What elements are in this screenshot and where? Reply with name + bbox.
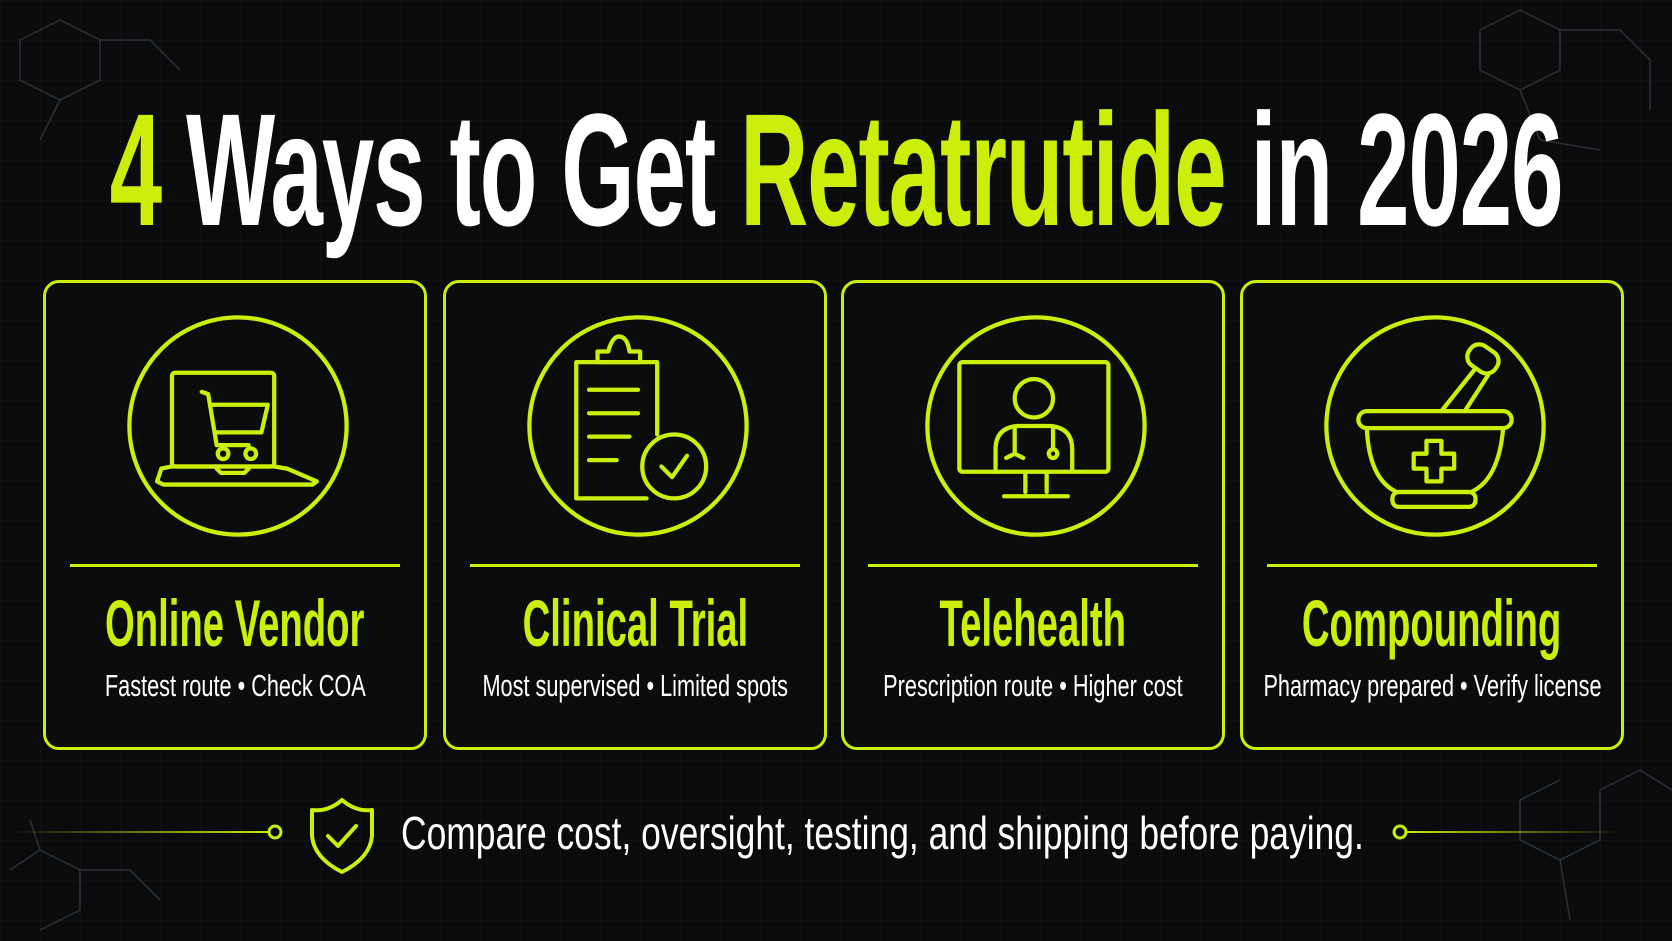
icon: clipboard with check <box>527 315 749 537</box>
icon: laptop with cart <box>127 315 349 537</box>
panel: online vendor <box>43 280 427 750</box>
callout: footer advice: Compare cost, oversight, testing, and shipping before paying. <box>401 807 1364 859</box>
title: 4 Ways to Get Retatrutide in 2026 <box>110 80 1562 259</box>
footer rule left <box>20 824 282 840</box>
text: telehealth note: Prescription route • Higher cost <box>883 668 1183 703</box>
icon: monitor with doctor <box>925 315 1147 537</box>
footer rule right <box>1392 824 1614 840</box>
text: online vendor note: Fastest route • Check COA <box>105 668 365 703</box>
heading: online vendor: Online Vendor <box>105 586 365 660</box>
icon: mortar and pestle <box>1324 315 1546 537</box>
heading: compounding: Compounding <box>1302 586 1562 660</box>
heading: telehealth: Telehealth <box>940 586 1126 660</box>
icon: shield check <box>310 798 374 874</box>
text: compounding note: Pharmacy prepared • Verify license <box>1263 668 1601 703</box>
panel: compounding <box>1240 280 1624 750</box>
panel: telehealth <box>841 280 1225 750</box>
text: clinical trial note: Most supervised • Limited spots <box>482 668 788 703</box>
panel: clinical trial <box>443 280 827 750</box>
heading: clinical trial: Clinical Trial <box>522 586 748 660</box>
